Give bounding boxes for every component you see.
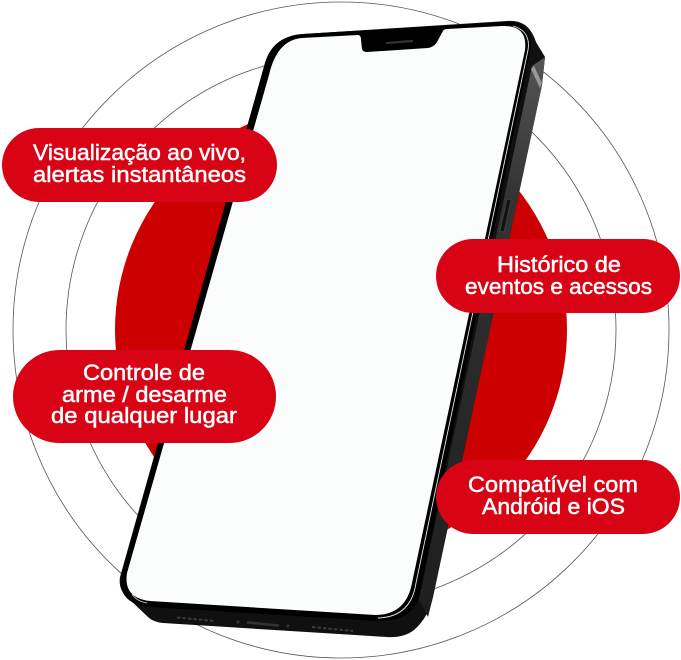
callout: event history — [436, 239, 680, 313]
smartphone — [120, 21, 545, 637]
bottom screw right — [286, 624, 290, 628]
callout: compatibility — [436, 460, 680, 534]
callout: arm and disarm: arme / desarme — [62, 382, 227, 407]
side button — [500, 199, 511, 232]
callout: live view — [2, 128, 277, 202]
callout: arm and disarm: Controle de — [83, 360, 205, 385]
screen — [126, 26, 525, 615]
callout: arm and disarm — [13, 350, 276, 443]
red central circle — [115, 104, 567, 556]
phone side face — [419, 57, 545, 617]
side highlight band — [531, 66, 542, 88]
callout: arm and disarm: de qualquer lugar — [51, 403, 237, 428]
bottom right speaker — [312, 627, 353, 631]
phone body — [120, 21, 545, 637]
callout: compatibility: Andróid e iOS — [482, 494, 625, 519]
callout: compatibility: Compatível com — [468, 472, 638, 497]
callout: live view: alertas instantâneos — [33, 162, 246, 187]
bezel highlight corner — [132, 594, 147, 603]
earpiece — [387, 41, 412, 43]
front bezel — [121, 22, 531, 621]
callout: event history: eventos e acessos — [465, 274, 652, 299]
bottom screw left — [236, 620, 240, 624]
bezel highlight line — [378, 26, 528, 618]
charging port — [248, 622, 278, 626]
callout: live view: Visualização ao vivo, — [33, 140, 246, 165]
callout: event history: Histórico de — [497, 252, 621, 277]
bottom left speaker — [177, 618, 215, 621]
